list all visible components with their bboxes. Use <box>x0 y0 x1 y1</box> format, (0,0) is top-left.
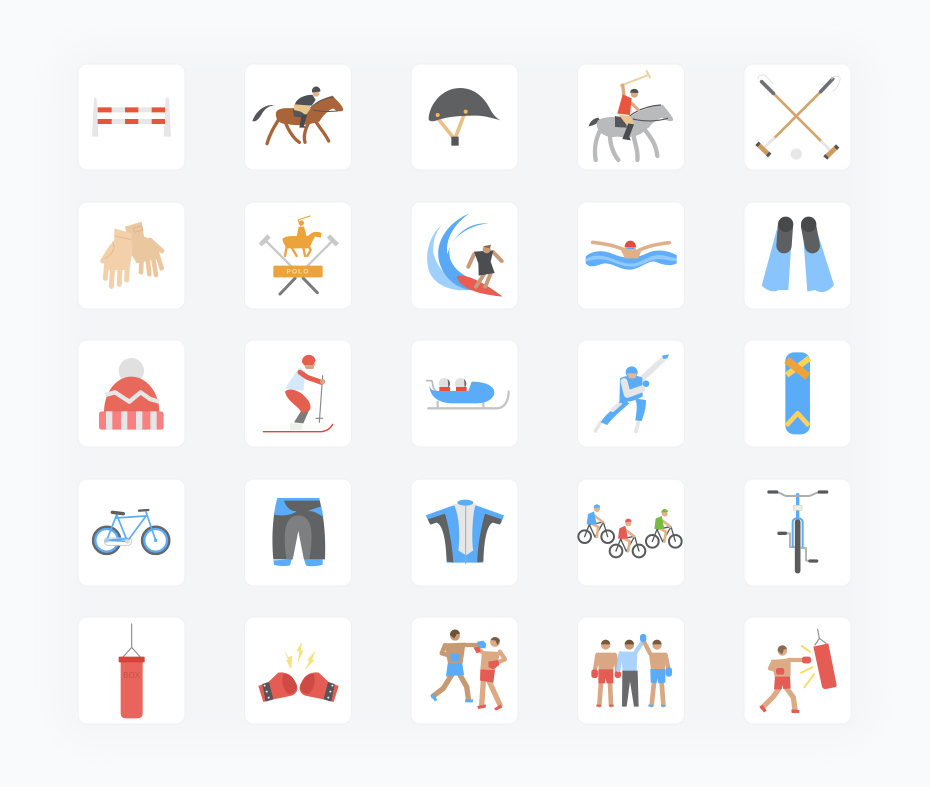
icon: referee raising winner <box>591 634 672 707</box>
icon: horse and jockey <box>252 86 343 144</box>
boxer: blue <box>431 629 486 702</box>
panel: punching bag <box>78 617 185 724</box>
icon: cycling shorts <box>272 498 325 566</box>
panel: swimmer <box>578 202 684 309</box>
panel: boxers fighting <box>411 617 518 724</box>
boxer: red <box>473 637 505 711</box>
referee <box>618 640 642 707</box>
banner text: POLO <box>287 269 309 276</box>
icon: winter hat <box>99 358 164 430</box>
panel: skier <box>244 340 352 447</box>
icon: flippers <box>762 217 834 292</box>
panel: cyclists <box>578 479 684 586</box>
icon: boxer hitting bag <box>759 629 837 713</box>
glove: right <box>300 672 339 702</box>
icon: speed skater <box>595 354 669 432</box>
panel: fence <box>78 64 185 170</box>
icon: two boxers <box>431 629 505 711</box>
panel: polo mallets <box>744 64 851 170</box>
cyclist: green <box>646 509 682 548</box>
panel: bicycle <box>78 479 185 586</box>
icon: surfer on wave <box>427 213 503 297</box>
panel: cycling shorts <box>244 479 352 586</box>
panel: bobsled <box>411 340 518 447</box>
panel: cycling jersey <box>411 479 518 586</box>
cyclist: blue <box>578 504 614 543</box>
panel: horse rider <box>244 64 352 170</box>
icon: bicycle <box>93 510 169 554</box>
cyclist: red <box>610 519 645 557</box>
panel: boxer and heavy bag <box>744 617 851 724</box>
panel: speed skater <box>578 340 684 447</box>
boxer: blue shorts <box>640 634 672 707</box>
panel: helmet <box>411 64 518 170</box>
bag label: BOX <box>123 671 141 680</box>
panel: gloves <box>78 202 185 309</box>
panel: polo player <box>578 64 684 170</box>
panel: surfer <box>411 202 518 309</box>
icon: butterfly swimmer <box>586 241 677 270</box>
icon: three cyclists <box>578 504 682 557</box>
glove: left <box>258 672 297 702</box>
icon: snowboard <box>785 352 810 434</box>
icon: riding gloves <box>103 222 162 286</box>
icon: jump fence <box>92 97 171 137</box>
panel: boxing gloves <box>244 617 352 724</box>
icon: crossed mallets and ball <box>755 75 840 160</box>
panel: swim fins <box>744 202 851 309</box>
icon: downhill skier <box>263 355 333 432</box>
icon: polo player on grey horse <box>589 71 673 160</box>
icon: cycling jersey <box>426 500 504 564</box>
panel: snowboard <box>744 340 851 447</box>
icon: riding helmet <box>429 88 501 146</box>
panel: referee and boxers <box>578 617 684 724</box>
panel: bike front view <box>744 479 851 586</box>
panel: beanie <box>78 340 185 447</box>
icon: bicycle front <box>769 492 827 571</box>
icon: clashing boxing gloves <box>258 642 339 702</box>
boxer: red shorts <box>591 640 621 707</box>
panel: polo emblem <box>244 202 352 309</box>
icon: bobsleigh <box>427 378 509 408</box>
